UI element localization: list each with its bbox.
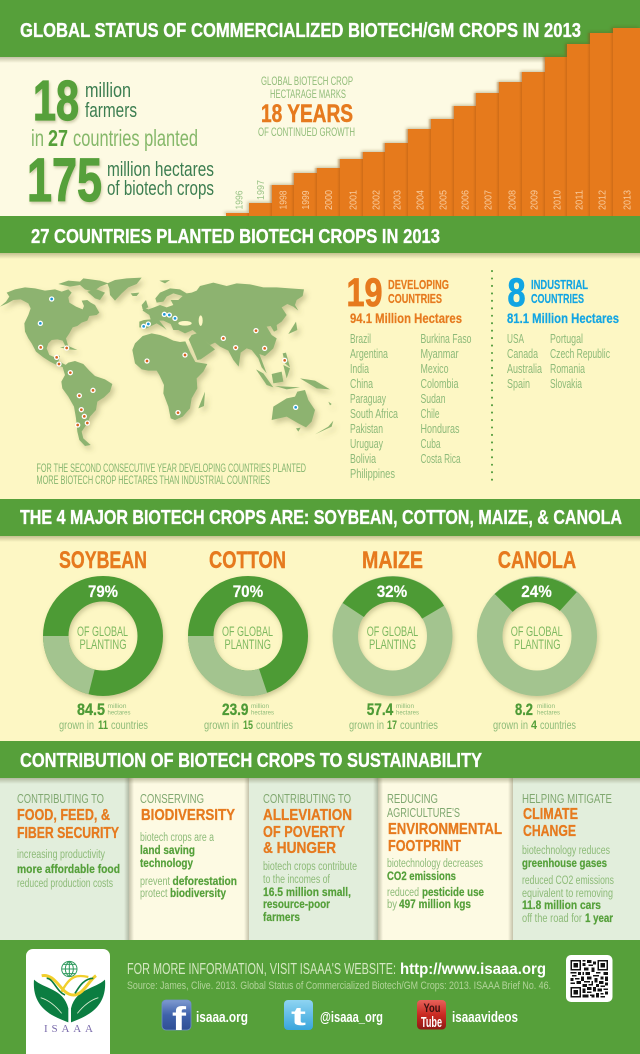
footer text: website and source: http://www.isaaa.org	[400, 961, 546, 978]
bar chart: hectarage 1996-2013	[226, 28, 640, 216]
panel: alleviation of poverty and hunger: farmers	[263, 912, 300, 924]
panel: environmental footprint: reduced	[387, 887, 419, 899]
panel: 8 industrial countries: Spain	[507, 376, 530, 391]
panel: conserving biodiversity: prevent	[140, 876, 171, 888]
map caption: MORE BIOTECH CROP HECTARES THAN INDUSTRIAL COUNTRIES	[36, 473, 270, 487]
panel: food, feed and fiber security: CONTRIBUTING TO	[17, 791, 104, 806]
panel: climate change: CLIMATE	[523, 806, 578, 823]
panel: environmental footprint: REDUCING	[387, 791, 438, 806]
panel: 19 developing countries: China	[350, 376, 374, 391]
crop: canola: 8.2	[515, 700, 533, 719]
panel: 19 developing countries: DEVELOPING	[388, 277, 449, 292]
panel: alleviation of poverty and hunger: biotech crops contribute	[263, 861, 357, 873]
stat: 18 million farmers in 27 countries: in	[31, 125, 44, 151]
panel: alleviation of poverty and hunger: 16.5 million small,	[263, 887, 351, 899]
bar chart: hectarage 1996-2013: 2010	[552, 190, 564, 210]
icon: QR code	[566, 955, 612, 1002]
stat: 175 million hectares of biotech crops: million hectares	[107, 159, 214, 181]
panel: food, feed and fiber security: reduced production costs	[17, 878, 113, 890]
crop: canola: PLANTING	[514, 637, 560, 652]
crop: maize: 57.4	[367, 700, 394, 719]
panel: alleviation of poverty and hunger: CONTRIBUTING TO	[263, 791, 351, 806]
panel: 8 industrial countries: Romania	[550, 361, 586, 376]
panel: 19 developing countries: 94.1 Million Hectares	[350, 310, 462, 326]
panel: alleviation of poverty and hunger	[249, 778, 378, 940]
map caption: FOR THE SECOND CONSECUTIVE YEAR DEVELOPING COUNTRIES PLANTED	[36, 461, 306, 475]
footer background	[0, 940, 640, 1054]
bar chart: hectarage 1996-2013: 2008	[508, 190, 518, 210]
panel: 8 industrial countries: Portugal	[550, 331, 583, 346]
bar chart: hectarage 1996-2013: 2012	[598, 190, 608, 210]
bar chart: hectarage 1996-2013: 2013	[622, 190, 634, 210]
panel: 19 developing countries: Burkina Faso	[420, 331, 472, 346]
crop: cotton: COTTON	[209, 547, 286, 574]
crop: maize: MAIZE	[362, 547, 423, 574]
heading band: 27 countries	[0, 216, 640, 259]
icon: Facebook: f	[172, 1000, 187, 1037]
panel: climate change: biotechnology reduces	[522, 845, 610, 857]
panel: 19 developing countries: Myanmar	[420, 346, 459, 361]
panel: conserving biodiversity: biodiversity	[170, 888, 227, 900]
footer text: website and source	[127, 961, 551, 992]
icon: Facebook	[162, 1000, 191, 1037]
map caption	[36, 461, 306, 487]
bar chart: hectarage 1996-2013: 2003	[392, 190, 404, 210]
panel: 19 developing countries	[346, 271, 472, 481]
panel: 19 developing countries: Cuba	[420, 436, 441, 451]
stat: 18 million farmers in 27 countries	[31, 69, 198, 151]
panel: environmental footprint: biotechnology decreases	[387, 858, 483, 870]
icon: YouTube: You	[424, 1001, 440, 1015]
bar chart: hectarage 1996-2013: 2001	[348, 190, 360, 210]
crop: maize: PLANTING	[369, 637, 416, 652]
icon: Twitter	[284, 1000, 313, 1031]
crop: maize: 17	[387, 718, 397, 732]
panel: 19 developing countries: Chile	[420, 406, 440, 421]
crop: maize: million	[396, 703, 414, 710]
background: crops section	[0, 536, 640, 741]
logo: ISAAA: ISAAA	[44, 1023, 93, 1035]
bar chart: hectarage 1996-2013: 2004	[416, 190, 426, 210]
crop: soybean: 11	[98, 718, 108, 732]
bar chart: hectarage 1996-2013: 1999	[301, 190, 312, 210]
panel: environmental footprint: 497 million kgs	[399, 899, 471, 911]
panel: 8 industrial countries: INDUSTRIAL	[531, 277, 588, 292]
stat: 18 million farmers in 27 countries: million	[85, 80, 131, 102]
panel: 8 industrial countries: Canada	[507, 346, 539, 361]
panel: alleviation of poverty and hunger: resource-poor	[263, 899, 330, 911]
panel: 19 developing countries: Brazil	[350, 331, 371, 346]
panel: food, feed and fiber security	[0, 778, 129, 940]
icon: YouTube	[417, 1000, 446, 1031]
panel: climate change: greenhouse gases	[522, 858, 607, 870]
crop: canola: CANOLA	[498, 547, 576, 574]
footer text: website and source: FOR MORE INFORMATION, VISIT ISAAA'S WEBSITE:	[127, 961, 396, 978]
bar chart: hectarage 1996-2013: 1996	[234, 190, 246, 210]
panel: 8 industrial countries: Australia	[507, 361, 543, 376]
crop: soybean: grown in	[59, 718, 94, 732]
stat: 18 million farmers in 27 countries: 18	[33, 69, 79, 133]
bar chart: hectarage 1996-2013: 1998	[278, 190, 290, 210]
crop: soybean: million	[108, 703, 127, 710]
crop: soybean: 79%	[88, 582, 118, 601]
panel: 19 developing countries: Sudan	[420, 391, 446, 406]
crop: maize	[343, 547, 444, 732]
crop: maize: countries	[400, 718, 438, 732]
social label: isaaa.org: isaaa.org	[196, 1010, 248, 1026]
callout: 18 years of continued growth: OF CONTINUED GROWTH	[258, 125, 355, 139]
panel: 8 industrial countries: Czech Republic	[550, 346, 610, 361]
panel: food, feed and fiber security: FOOD, FEED, &	[17, 807, 110, 824]
panel: 19 developing countries: Pakistan	[350, 421, 383, 436]
bar chart: hectarage 1996-2013: 2009	[530, 190, 540, 210]
crop: soybean: countries	[111, 718, 148, 732]
bar chart: hectarage 1996-2013: 2007	[484, 190, 494, 210]
bar chart: hectarage 1996-2013: 2000	[324, 190, 335, 210]
panel: 19 developing countries: Colombia	[420, 376, 459, 391]
panel: conserving biodiversity: technology	[140, 858, 194, 870]
panel: environmental footprint	[378, 778, 513, 940]
callout: 18 years of continued growth: GLOBAL BIOTECH CROP	[261, 74, 353, 88]
background: map section	[0, 253, 640, 499]
crop: soybean: 84.5	[77, 700, 105, 719]
panel: climate change	[513, 778, 640, 940]
bar chart: hectarage 1996-2013: 2006	[460, 190, 472, 210]
panel: 19 developing countries: Mexico	[420, 361, 448, 376]
crop: soybean: OF GLOBAL	[77, 624, 128, 639]
panel: 19 developing countries: 19	[346, 271, 382, 315]
panel: conserving biodiversity: CONSERVING	[140, 791, 204, 806]
world map with country markers	[0, 278, 333, 446]
crop: canola	[490, 547, 584, 732]
icon: Twitter: t	[291, 1001, 307, 1031]
panel: environmental footprint: by	[387, 899, 397, 911]
panel: 19 developing countries: Bolivia	[350, 451, 377, 466]
panel: alleviation of poverty and hunger: OF POVERTY	[263, 824, 345, 841]
panel: environmental footprint: AGRICULTURE'S	[387, 805, 460, 820]
crop: cotton: countries	[256, 718, 293, 732]
crop: cotton: OF GLOBAL	[222, 624, 273, 639]
social label: @isaaa_org: @isaaa_org	[320, 1010, 383, 1026]
panel: climate change: 11.8 million cars	[522, 900, 601, 912]
panel: 19 developing countries: India	[350, 361, 370, 376]
panel: 8 industrial countries	[507, 271, 619, 391]
crop: soybean: SOYBEAN	[59, 547, 147, 574]
crop: canola: 4	[531, 718, 537, 732]
callout: 18 years of continued growth	[258, 74, 355, 139]
crop: cotton: hectares	[251, 710, 275, 716]
bar chart: hectarage 1996-2013: 2005	[438, 190, 450, 210]
heading band: sustainability	[0, 741, 640, 784]
panel: 19 developing countries: South Africa	[350, 406, 399, 421]
panel: 8 industrial countries: 8	[508, 271, 526, 315]
panel: climate change: equivalent to removing	[522, 888, 613, 900]
crop: maize: hectares	[396, 710, 420, 716]
panel: 19 developing countries: Uruguay	[350, 436, 383, 451]
panel: conserving biodiversity: BIODIVERSITY	[141, 807, 235, 824]
crop: maize: grown in	[349, 718, 384, 732]
stat: 18 million farmers in 27 countries: 27	[48, 125, 68, 151]
panel: environmental footprint: CO2 emissions	[387, 871, 456, 883]
panel: conserving biodiversity: protect	[140, 888, 168, 900]
stat: 18 million farmers in 27 countries: farmers	[85, 100, 137, 122]
title banner	[0, 0, 640, 63]
panel: food, feed and fiber security: FIBER SECURITY	[17, 825, 119, 842]
crop: cotton: 23.9	[222, 700, 248, 719]
crop: maize: 32%	[377, 582, 407, 601]
bar chart: hectarage 1996-2013: 2002	[372, 190, 382, 210]
stat: 18 million farmers in 27 countries: countries planted	[73, 125, 198, 151]
crop: cotton: 70%	[233, 582, 263, 601]
panel: 19 developing countries: Argentina	[350, 346, 389, 361]
stat: 175 million hectares of biotech crops	[27, 146, 214, 214]
panel: conserving biodiversity: land saving	[140, 845, 195, 857]
bar chart: hectarage 1996-2013: 2011	[574, 190, 586, 210]
crop: canola: hectares	[537, 710, 561, 716]
panel: conserving biodiversity: biotech crops are a	[140, 832, 214, 844]
social label: isaaavideos: isaaavideos	[452, 1010, 518, 1026]
crop: cotton: million	[251, 703, 269, 710]
crop: canola: million	[537, 703, 555, 710]
panel: 8 industrial countries: COUNTRIES	[531, 291, 584, 306]
crop: canola: grown in	[493, 718, 528, 732]
panel: food, feed and fiber security: increasing productivity	[17, 849, 105, 861]
icon: YouTube: Tube	[421, 1014, 442, 1031]
crop: canola: 24%	[521, 582, 552, 601]
crop: cotton: PLANTING	[224, 637, 271, 652]
panel: 19 developing countries: Paraguay	[350, 391, 386, 406]
panel: climate change: CHANGE	[523, 823, 576, 840]
panel: environmental footprint: ENVIRONMENTAL	[388, 821, 502, 838]
panel: 19 developing countries: Costa Rica	[420, 451, 461, 466]
callout: 18 years of continued growth: 18 YEARS	[261, 100, 353, 128]
logo: ISAAA	[26, 949, 110, 1054]
crop: canola: OF GLOBAL	[511, 624, 563, 639]
panel: alleviation of poverty and hunger: to the incomes of	[263, 874, 331, 886]
panel: environmental footprint: FOOTPRINT	[388, 838, 461, 855]
bar chart: hectarage 1996-2013: 1997	[256, 180, 267, 200]
crop: soybean: hectares	[108, 710, 131, 716]
panel: climate change: 1 year	[585, 913, 613, 925]
panel: food, feed and fiber security: more affordable food	[17, 864, 120, 876]
heading band: sustainability: CONTRIBUTION OF BIOTECH CROPS TO SUSTAINABILITY	[20, 750, 483, 772]
stat: 175 million hectares of biotech crops: 175	[27, 146, 102, 214]
crop: canola: countries	[540, 718, 576, 732]
crop: soybean: PLANTING	[80, 637, 126, 652]
crop: maize: OF GLOBAL	[367, 624, 419, 639]
heading band: 27 countries: 27 COUNTRIES PLANTED BIOTECH CROPS IN 2013	[31, 226, 440, 248]
panel: 8 industrial countries: Slovakia	[550, 376, 582, 391]
panel: 8 industrial countries: USA	[507, 331, 524, 346]
panel: conserving biodiversity: deforestation	[172, 876, 237, 888]
crop: soybean	[43, 547, 150, 732]
panel: 19 developing countries: Honduras	[420, 421, 460, 436]
crop: cotton: grown in	[204, 718, 239, 732]
crop: cotton: 15	[243, 718, 253, 732]
footer text: website and source: Source: James, Clive. 2013. Global Status of Commercialized Biotech/GM Crops: 2013. ISAAA Brief No. 46.	[127, 980, 551, 992]
callout: 18 years of continued growth: HECTARAGE MARKS	[270, 87, 346, 101]
panel: alleviation of poverty and hunger: ALLEVIATION	[263, 807, 352, 824]
stat: 175 million hectares of biotech crops: of biotech crops	[107, 178, 214, 200]
heading band: 4 major crops	[0, 499, 640, 542]
panel: environmental footprint: pesticide use	[422, 887, 484, 899]
panel: climate change: HELPING MITIGATE	[522, 791, 612, 806]
panel: 19 developing countries: COUNTRIES	[388, 291, 442, 306]
panel: alleviation of poverty and hunger: & HUNGER	[263, 840, 336, 857]
crop: cotton	[188, 547, 295, 732]
panel: climate change: off the road for	[522, 913, 582, 925]
background: top section	[0, 57, 640, 216]
panel: 19 developing countries: Philippines	[350, 466, 395, 481]
panel: conserving biodiversity	[129, 778, 249, 940]
